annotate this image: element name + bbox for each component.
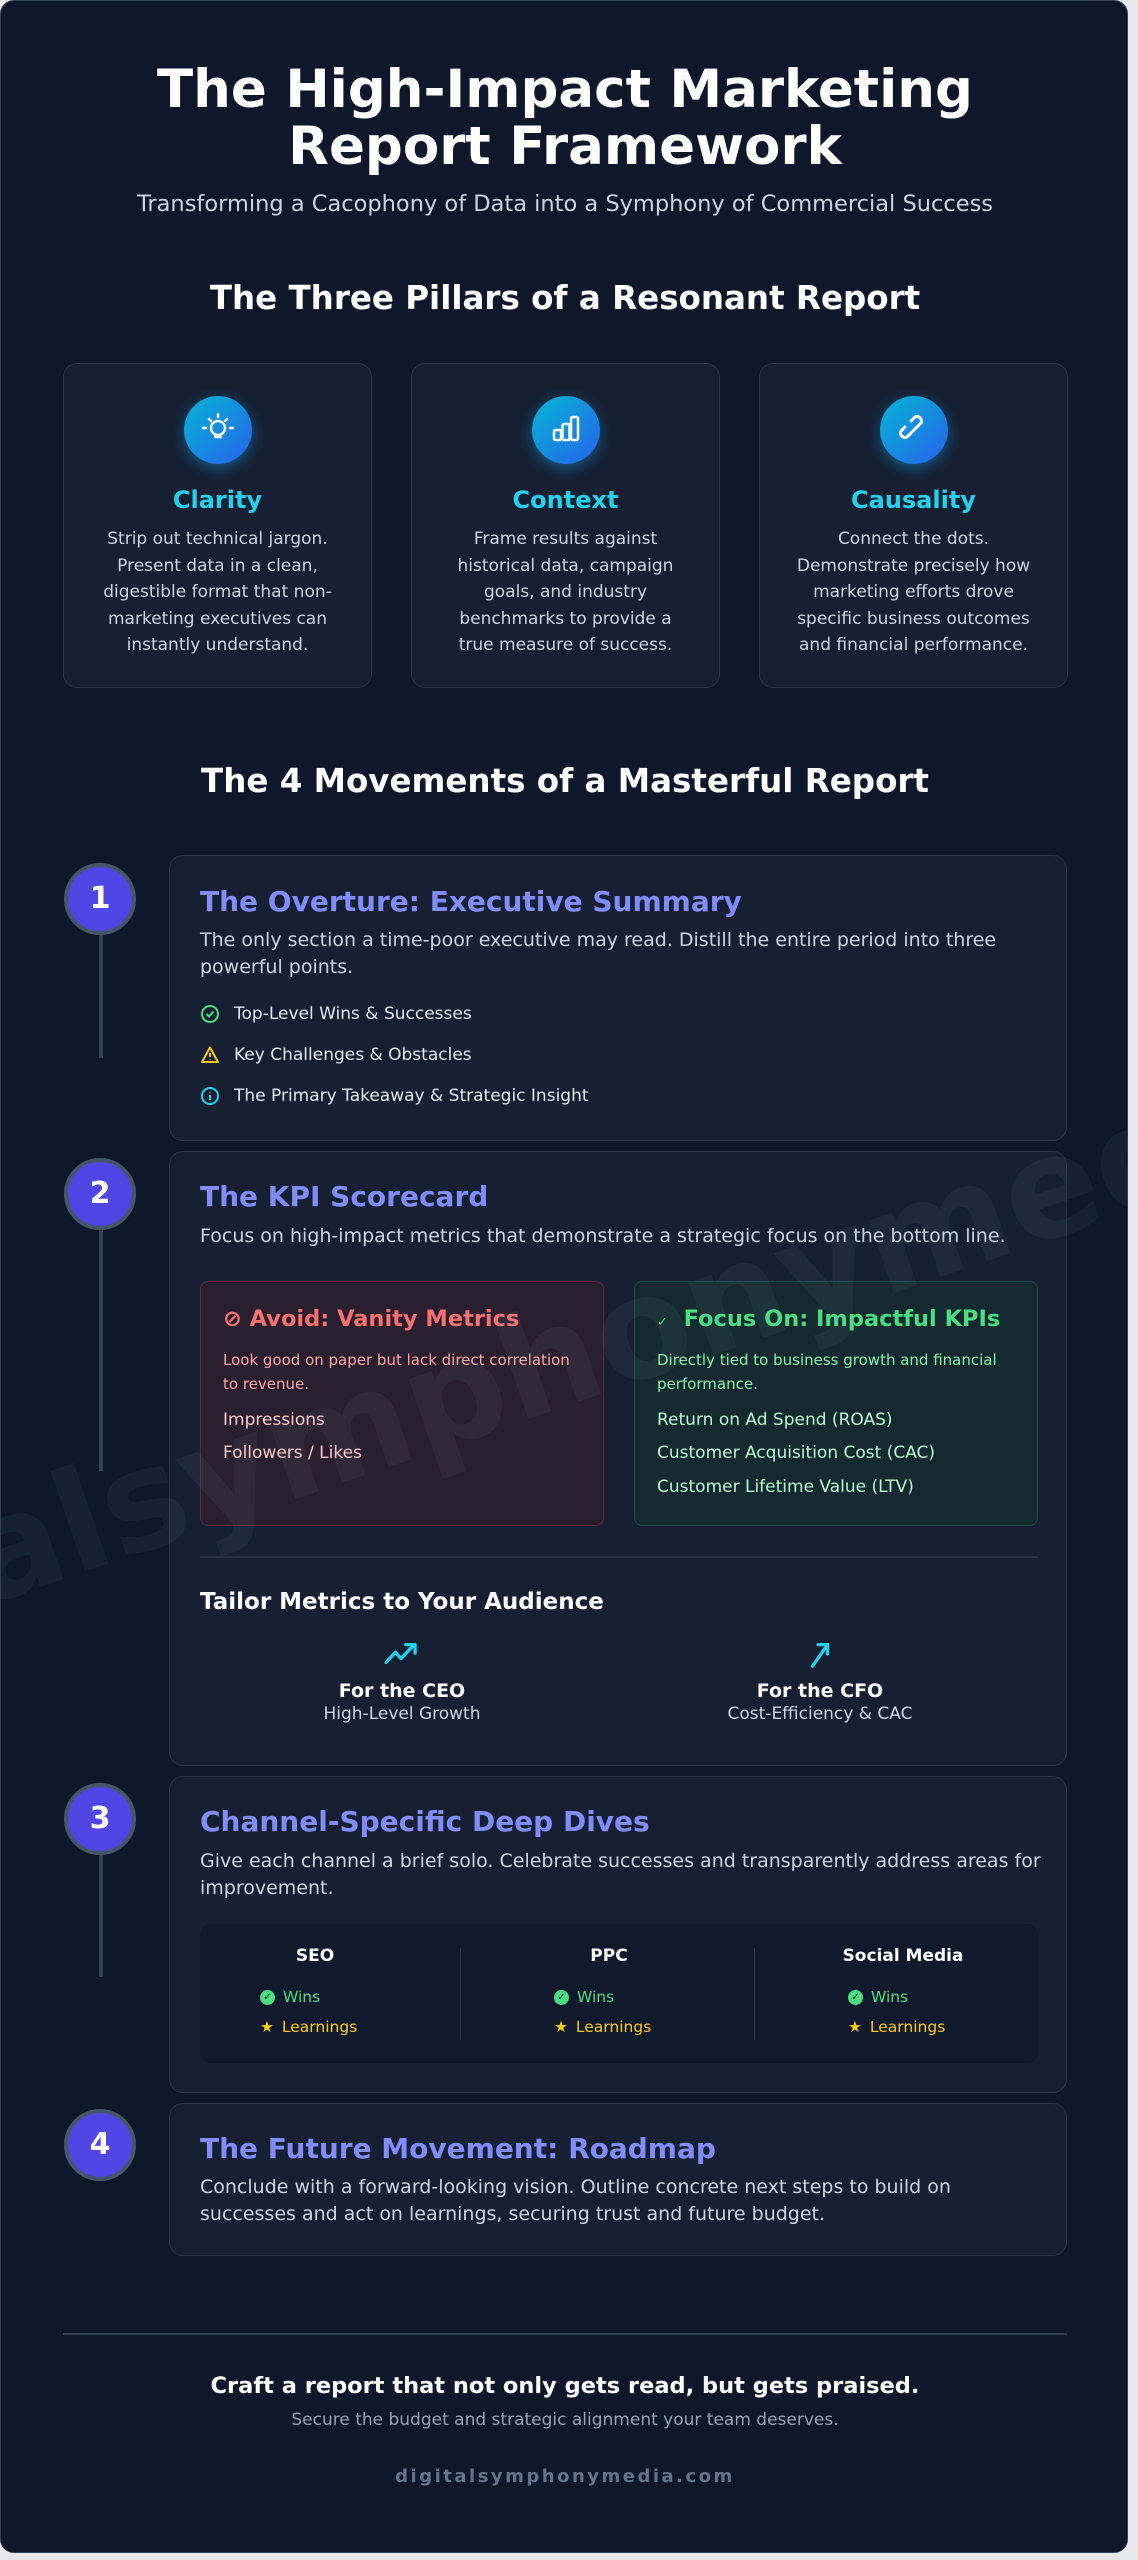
icon: lightbulb: [184, 396, 252, 464]
badge 2: [64, 1158, 136, 1230]
channel: SEO: ★: [260, 2018, 274, 2036]
section text: Focus on high-impact metrics that demonstrate a strategic focus on the bottom line.: [200, 1225, 1006, 1247]
badge 1: [64, 863, 136, 935]
heading: three pillars: The Three Pillars of a Resonant Report: [210, 279, 920, 317]
subheading: tailor metrics: Tailor Metrics to Your Audience: [200, 1589, 604, 1615]
icon: arrow up right: [810, 1643, 830, 1668]
panel: roadmap: [169, 2103, 1067, 2256]
box title: ⊘ Avoid: Vanity Metrics: [223, 1306, 519, 1332]
icon: chart: [532, 396, 600, 464]
audience: CEO: [323, 1642, 481, 1724]
section title: The Overture: Executive Summary: [200, 885, 742, 918]
channel: PPC: PPC: [590, 1946, 628, 1966]
panel: executive summary: [169, 855, 1067, 1141]
icon: trend: [384, 1642, 417, 1664]
pillar title: Causality: [851, 486, 976, 514]
section title: Channel-Specific Deep Dives: [200, 1805, 650, 1838]
box: avoid vanity metrics: [200, 1281, 604, 1526]
box text: Directly tied to business growth and financial performance.: [657, 1351, 997, 1393]
heading: four movements: The 4 Movements of a Masterful Report: [201, 762, 929, 800]
pillar text: Connect the dots. Demonstrate precisely how marketing efforts drove specific business outcomes and financial performance.: [797, 529, 1030, 655]
section text: The only section a time-poor executive may read. Distill the entire period into three powerful points.: [200, 929, 996, 978]
channel: SEO: SEO: [296, 1946, 334, 1966]
audience: CEO: For the CEO: [339, 1680, 465, 1702]
channel: social media: Learnings: [870, 2018, 945, 2036]
section title: The Future Movement: Roadmap: [200, 2132, 716, 2165]
box text: Look good on paper but lack direct correlation to revenue.: [223, 1351, 570, 1393]
channel: SEO: Learnings: [282, 2018, 357, 2036]
timeline line 2: [99, 1221, 103, 1471]
panel: KPI scorecard: [169, 1151, 1067, 1766]
badge 3: [64, 1783, 136, 1855]
timeline line 3: [99, 1851, 103, 1977]
list item: wins: Top-Level Wins & Successes: [234, 1004, 472, 1024]
audience: CFO: [728, 1643, 912, 1724]
list item: challenges: Key Challenges & Obstacles: [234, 1045, 472, 1065]
channel: social media: Wins: [871, 1988, 908, 2006]
title: The High-Impact Marketing: [157, 59, 973, 120]
channel: social media: Social Media: [843, 1946, 963, 1966]
title: Report Framework: [288, 116, 842, 177]
subtitle: Transforming a Cacophony of Data into a Symphony of Commercial Success: [137, 191, 993, 217]
icon: link: [880, 396, 948, 464]
item: Followers / Likes: [223, 1443, 362, 1463]
item: Customer Acquisition Cost (CAC): [657, 1443, 935, 1463]
panel: clarity: [63, 363, 372, 688]
panel: channel deep dives: [169, 1776, 1067, 2093]
badge 2: 2: [90, 1176, 110, 1211]
title: [157, 59, 973, 177]
pillar title: Context: [513, 486, 618, 514]
channel: PPC: Wins: [577, 1988, 614, 2006]
section text: Conclude with a forward-looking vision. Outline concrete next steps to build on successes and act on learnings, securing trust and future budget.: [200, 2176, 951, 2225]
section text: Give each channel a brief solo. Celebrate successes and transparently address areas for improvement.: [200, 1850, 1041, 1899]
channel grid: [200, 1924, 1038, 2063]
audience: CFO: For the CFO: [757, 1680, 883, 1702]
channel: social media: ★: [848, 2018, 862, 2036]
channel: PPC: [554, 1946, 651, 2036]
channel: SEO: ✓: [263, 1992, 272, 2002]
audience: CFO: Cost-Efficiency & CAC: [728, 1704, 912, 1724]
panel: causality: [759, 363, 1068, 688]
channel: SEO: Wins: [283, 1988, 320, 2006]
badge 4: 4: [90, 2127, 110, 2162]
item: Return on Ad Spend (ROAS): [657, 1410, 893, 1430]
channel: SEO: [260, 1946, 357, 2036]
channel: PPC: ✓: [557, 1992, 566, 2002]
badge 1: 1: [90, 881, 110, 916]
channel: social media: [843, 1946, 963, 2036]
closing statement: Craft a report that not only gets read, but gets praised.: [211, 2373, 919, 2399]
panel: context: [411, 363, 720, 688]
channel: PPC: Learnings: [576, 2018, 651, 2036]
box: focus on KPIs: [634, 1281, 1038, 1526]
section title: The KPI Scorecard: [200, 1180, 488, 1213]
channel: PPC: ★: [554, 2018, 568, 2036]
pillar text: Strip out technical jargon. Present data in a clean, digestible format that non-marketing executives can instantly understand.: [103, 529, 332, 655]
badge 3: 3: [90, 1801, 110, 1836]
item: Customer Lifetime Value (LTV): [657, 1477, 914, 1497]
list item: takeaway: The Primary Takeaway & Strategic Insight: [234, 1086, 589, 1106]
pillar text: Frame results against historical data, campaign goals, and industry benchmarks to provide a true measure of success.: [458, 529, 673, 655]
channel: social media: ✓: [851, 1992, 860, 2002]
closing subtext: Secure the budget and strategic alignment your team deserves.: [291, 2410, 839, 2430]
box title: ✓ Focus On: Impactful KPIs: [657, 1306, 1000, 1332]
item: Impressions: [223, 1410, 325, 1430]
badge 4: [64, 2109, 136, 2181]
timeline line 1: [99, 931, 103, 1058]
pillar title: Clarity: [173, 486, 262, 514]
brand footer: digitalsymphonymedia.com: [395, 2466, 735, 2487]
audience: CEO: High-Level Growth: [323, 1704, 481, 1724]
